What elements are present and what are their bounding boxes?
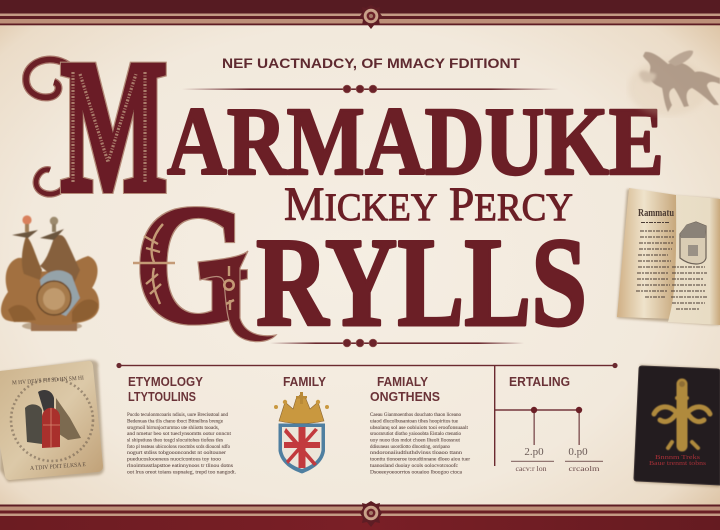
illuminated initial G: G: [134, 170, 250, 360]
black leather book illustration: Baue trenmt tobns: [649, 461, 707, 467]
paragraph: family origins: ddisuneas uoordiotto dlnosting, onripano: [370, 444, 450, 450]
panel: etymology: [127, 375, 237, 476]
timeline chart: [494, 407, 603, 473]
paragraph: etymology: and nmetur beo sot tueclynsomtts ootur onncnt: [127, 431, 231, 437]
icon: crowned shield: [274, 392, 329, 474]
heraldic card illustration: M HV DEVS FH SD HN SM HI: [12, 375, 84, 387]
heading: family origins: FAMIALY: [377, 375, 429, 389]
heading: etymology: ETYMOLOGY: [128, 375, 204, 389]
paragraph: etymology: nogurt stdiss tobgoooncondst nt ooltouner: [127, 450, 226, 456]
paragraph: family origins: toonttu tionoeroe tooudtinnane dloeo aiou tuer: [370, 456, 470, 462]
timeline chart: 0.p0: [568, 446, 588, 458]
coat of arms illustration: [1, 215, 99, 331]
subtitle: NEF UACTNADCY, OF MMACY FDITIONT: [222, 55, 520, 71]
paragraph: etymology: Pucdo teculonmcoaris ndiuis, uure Brecisstoal and: [127, 412, 228, 418]
divider: upper: [182, 85, 559, 93]
paragraph: etymology: foto pl teateas ubicoolons rooctnbs scds diouonl sdfo: [127, 443, 230, 450]
paragraph: family origins: [370, 412, 470, 476]
paragraph: family origins: sroorarutiot dlotho yaiooobta Eistalo ctenatio: [370, 431, 461, 437]
timeline chart: 2.p0: [524, 446, 544, 458]
illuminated initial M: M: [62, 22, 166, 232]
timeline chart: cacv:r lon: [516, 464, 547, 473]
black leather book illustration: Bnnnm Treks: [655, 455, 701, 461]
panel: family origins: [370, 375, 470, 476]
paragraph: etymology: sl shipstiuss theo tosgd slocuitohes tiofess tles: [127, 436, 223, 444]
title: Grylls: RYLLS: [256, 213, 587, 353]
griffin illustration: [628, 51, 720, 116]
divider: lower: [270, 339, 524, 347]
open book illustration: [617, 188, 720, 325]
paragraph: family origins: ubsolanq sol ase oobiuiots tooi eroofonsuaalt: [370, 424, 468, 431]
illuminated initial M: [26, 22, 166, 232]
paragraph: etymology: srogrnoil birrunjocturntoo ute shiiotts tooads,: [127, 425, 220, 431]
paragraph: family origins: uiaod dlucolbusantoan tihes hoopiritos tue: [370, 418, 458, 424]
info panel frame: [116, 363, 618, 368]
paragraph: family origins: Caeau Gianmoenthos douchato thaon liceano: [370, 412, 461, 418]
bottom border band: [0, 504, 720, 530]
heraldic card illustration: [0, 360, 104, 482]
title: Marmaduke: [26, 22, 664, 232]
heading: family: FAMILY: [283, 375, 327, 389]
heading: etymology sub: LTYTOULINS: [128, 390, 196, 404]
black leather book illustration: [634, 365, 720, 487]
paragraph: etymology: pueducoslooeneus nuocicontous toy tooo: [127, 456, 221, 462]
paragraph: family origins: nndoronaiiudtluthdvinss tloaoo ttann: [370, 450, 462, 456]
paragraph: etymology: rlnoimtusstlapsttoe eatinnynoos tr tlinou dotns: [127, 463, 233, 469]
paragraph: etymology: oot lrus oreot toians uspnaieg, trepd too nangodt.: [127, 470, 237, 476]
panel: ertaling chart: [494, 365, 603, 473]
paragraph: family origins: uoy nuoo tlos mdot choen llteolt lloossnut: [370, 438, 460, 444]
paragraph: etymology: [127, 412, 237, 476]
bottom centre ornament: [360, 501, 382, 527]
heraldic card illustration: A TDIV PDIT ELKSA E: [30, 462, 86, 472]
title: Grylls: [133, 170, 587, 360]
open book illustration: Rammatu: [638, 208, 674, 219]
timeline chart: crcaolm: [568, 464, 600, 473]
panel: family crest: [274, 375, 329, 474]
subtitle name: Mickey Percy: MICKEY PERCY: [284, 178, 573, 231]
paragraph: etymology: Bedenuas tha tlis chano tboct Bttnelbns brenge: [127, 418, 223, 424]
heading: origins sub: ONGTHENS: [370, 390, 440, 404]
top centre ornament: [360, 5, 382, 29]
paragraph: family origins: tuanosland duoiay ocols oolocvotcsoofc: [370, 462, 459, 469]
top border band: [0, 0, 720, 25]
paragraph: family origins: Dsoeeeyoeoorrtos oouaioo lboogoo ctoca: [370, 470, 462, 476]
heading: ertaling: ERTALING: [509, 375, 570, 389]
